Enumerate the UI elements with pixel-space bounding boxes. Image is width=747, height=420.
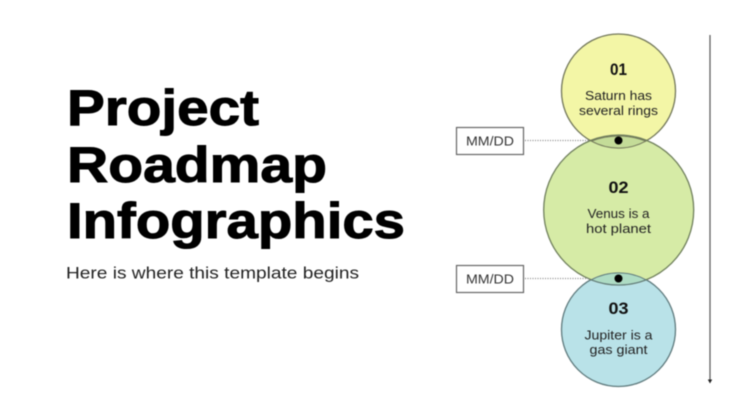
overlap: circles 02 and 03 xyxy=(591,273,646,285)
circle 03: Jupiter: 03 xyxy=(608,300,628,318)
circle 03: Jupiter: gas giant xyxy=(590,343,648,357)
date label 2 xyxy=(456,266,524,292)
date label 1 xyxy=(456,128,524,154)
marker dot 2 xyxy=(614,274,622,282)
circle 01: Saturn: 01 xyxy=(610,61,627,79)
marker dot 1 xyxy=(614,136,622,144)
title: Project xyxy=(67,80,259,136)
connector 1 xyxy=(525,140,590,142)
circle 02: Venus: 02 xyxy=(608,179,628,197)
date label 2: MM/DD xyxy=(466,272,514,286)
circle 02: Venus: hot planet xyxy=(586,222,652,236)
arrow: timeline xyxy=(708,35,712,384)
circle 01: Saturn xyxy=(562,34,676,148)
circle 01: Saturn: several rings xyxy=(579,104,658,118)
overlap: circles 01 and 02 xyxy=(591,136,646,148)
circle 03: Jupiter xyxy=(562,272,676,386)
date label 1: MM/DD xyxy=(466,134,514,148)
circle 01: Saturn: Saturn has xyxy=(585,89,652,103)
circle 02: Venus: Venus is a xyxy=(588,207,650,221)
circle 03: Jupiter: Jupiter is a xyxy=(584,328,653,342)
title: Roadmap xyxy=(67,137,327,193)
title: Infographics xyxy=(67,193,405,249)
title xyxy=(67,80,405,249)
connector 2 xyxy=(525,278,590,280)
circle 02: Venus xyxy=(544,135,694,285)
subtitle: Here is where this template begins xyxy=(66,264,359,282)
